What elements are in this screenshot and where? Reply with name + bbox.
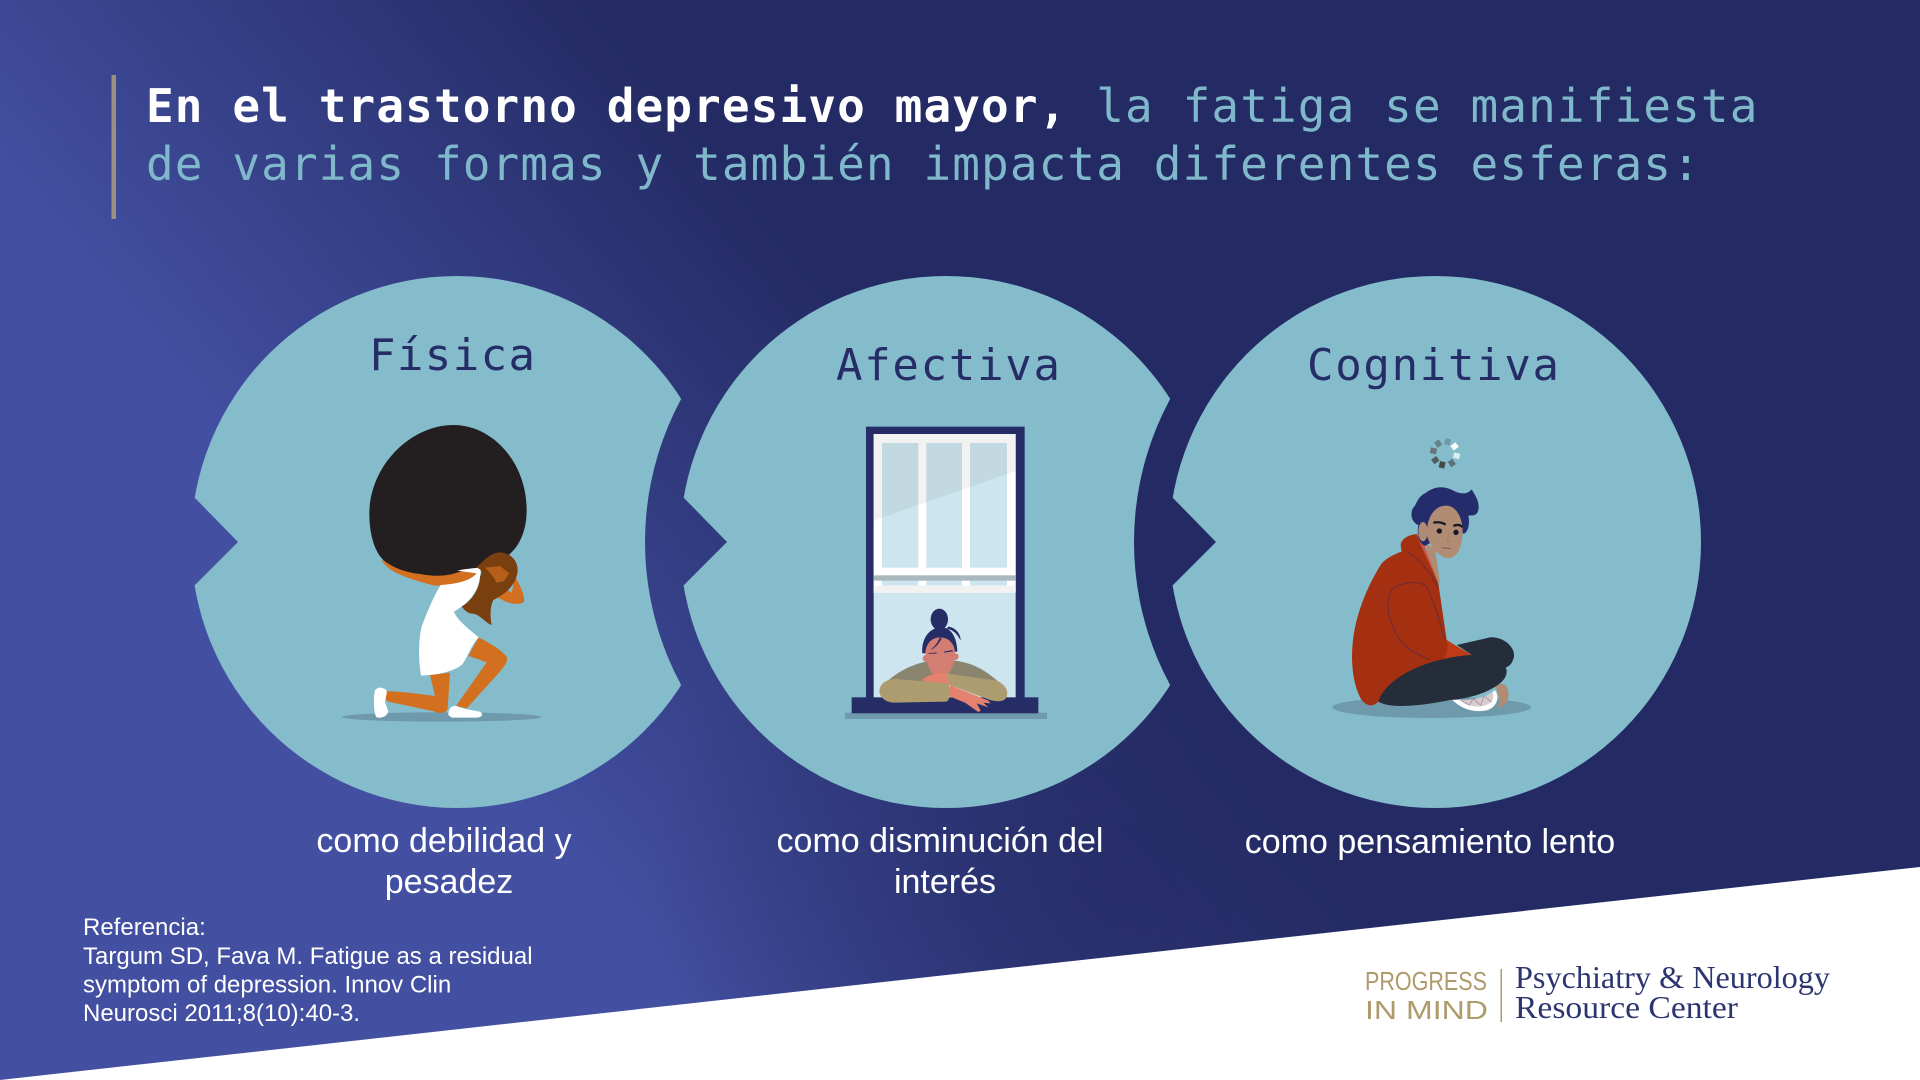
panel: Afectiva bbox=[680, 276, 1212, 808]
title bbox=[146, 79, 1758, 191]
heading: Afectiva: Afectiva bbox=[836, 340, 1060, 391]
reference text: Referencia: bbox=[83, 914, 206, 941]
illustration: person leaning at window bbox=[845, 427, 1047, 719]
reference text: Targum SD, Fava M. Fatigue as a residual bbox=[83, 943, 533, 970]
reference text: Neurosci 2011;8(10):40-3. bbox=[83, 1000, 360, 1027]
panel: Cognitiva bbox=[1169, 276, 1701, 808]
caption: Física: como debilidad y bbox=[316, 822, 572, 860]
illustration: woman carrying boulder bbox=[342, 425, 542, 722]
heading: Cognitiva: Cognitiva bbox=[1307, 340, 1559, 391]
caption: Cognitiva: como pensamiento lento bbox=[1245, 823, 1615, 861]
title: En el trastorno depresivo mayor, la fatiga se manifiesta bbox=[146, 79, 1758, 133]
panel: Física bbox=[191, 276, 723, 808]
logo: Progress in Mind: Resource Center bbox=[1515, 989, 1738, 1025]
title: de varias formas y también impacta diferentes esferas: bbox=[146, 137, 1701, 191]
white diagonal footer band bbox=[0, 867, 1920, 1080]
logo: Progress in Mind bbox=[1365, 959, 1830, 1025]
caption: Afectiva: como disminución del bbox=[777, 822, 1103, 860]
logo: Progress in Mind: Psychiatry & Neurology bbox=[1515, 959, 1830, 995]
caption: Afectiva: interés bbox=[894, 863, 996, 901]
logo: Progress in Mind: IN MIND bbox=[1365, 995, 1488, 1025]
caption: Física: pesadez bbox=[385, 863, 513, 901]
reference text: symptom of depression. Innov Clin bbox=[83, 972, 451, 998]
logo: Progress in Mind: PROGRESS bbox=[1365, 968, 1487, 996]
heading: Física: Física bbox=[369, 330, 535, 381]
illustration: person sitting with loading spinner bbox=[1332, 439, 1531, 718]
accent bar bbox=[112, 75, 116, 219]
